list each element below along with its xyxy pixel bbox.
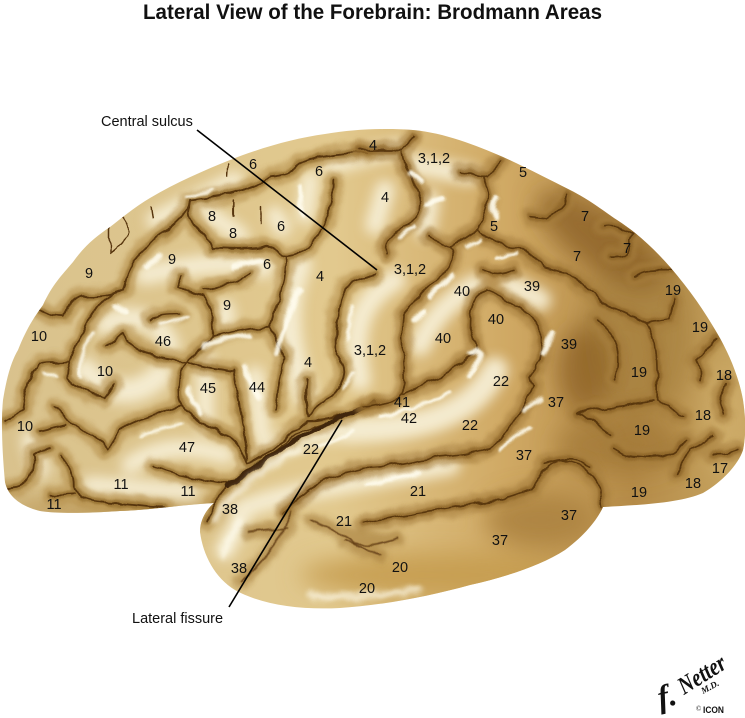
Brodmann area numbers: 22	[303, 442, 319, 458]
Brodmann area numbers: 19	[634, 423, 650, 439]
Brodmann area numbers: 5	[490, 219, 498, 235]
Brodmann area numbers: 37	[561, 508, 577, 524]
central sulcus label: Central sulcus	[101, 114, 193, 130]
Brodmann area numbers: 9	[85, 266, 93, 282]
Brodmann area numbers: 19	[631, 365, 647, 381]
Brodmann area numbers: 9	[168, 252, 176, 268]
Brodmann area numbers: 11	[113, 477, 129, 493]
Brodmann area numbers: 18	[685, 476, 701, 492]
Brodmann area numbers: 4	[369, 138, 377, 154]
signature: F. Netter M.D. and ICON mark: ©	[696, 705, 702, 713]
Brodmann area numbers: 19	[665, 283, 681, 299]
Brodmann area numbers: 19	[692, 320, 708, 336]
Brodmann area numbers: 45	[200, 381, 216, 397]
Brodmann area numbers: 47	[179, 440, 195, 456]
Brodmann area numbers: 6	[249, 157, 257, 173]
Brodmann area numbers: 21	[336, 514, 352, 530]
Brodmann area numbers: 10	[31, 329, 47, 345]
signature: F. Netter M.D. and ICON mark	[654, 650, 731, 715]
Brodmann area numbers: 37	[492, 533, 508, 549]
Brodmann area numbers: 8	[229, 226, 237, 242]
Brodmann area numbers: 4	[381, 190, 389, 206]
Brodmann area numbers: 39	[561, 337, 577, 353]
Brodmann area numbers: 37	[516, 448, 532, 464]
temporal pole sulci	[215, 450, 420, 597]
Brodmann area numbers: 19	[631, 485, 647, 501]
signature: F. Netter M.D. and ICON mark: f.	[654, 676, 680, 715]
Brodmann area numbers: 20	[359, 581, 375, 597]
Brodmann area numbers: 18	[716, 368, 732, 384]
Brodmann area numbers: 40	[488, 312, 504, 328]
Brodmann area numbers: 7	[573, 249, 581, 265]
Brodmann area numbers: 22	[493, 374, 509, 390]
Brodmann area numbers: 46	[155, 334, 171, 350]
brain illustration	[0, 120, 745, 620]
Brodmann area numbers: 38	[231, 561, 247, 577]
Brodmann area numbers: 6	[263, 257, 271, 273]
signature: F. Netter M.D. and ICON mark: M.D.	[698, 678, 721, 696]
lateral fissure label: Lateral fissure	[132, 611, 223, 627]
Brodmann area numbers: 22	[462, 418, 478, 434]
Brodmann area numbers: 10	[97, 364, 113, 380]
Brodmann area numbers: 11	[180, 484, 196, 500]
Brodmann area numbers: 10	[17, 419, 33, 435]
central sulcus leader line	[197, 130, 377, 270]
pale gyrus crowns	[30, 148, 540, 550]
Brodmann area numbers: 39	[524, 279, 540, 295]
title: Lateral View of the Forebrain: Brodmann Areas	[143, 1, 602, 24]
signature: F. Netter M.D. and ICON mark: ICON	[703, 705, 724, 715]
lateral fissure leader line	[229, 420, 342, 607]
Brodmann area numbers: 6	[277, 219, 285, 235]
Brodmann area numbers: 3,1,2	[354, 343, 386, 359]
Brodmann area numbers: 4	[304, 355, 312, 371]
Brodmann area numbers: 44	[249, 380, 265, 396]
Brodmann area numbers: 7	[623, 241, 631, 257]
sulci: parietal, temporal and occipital half	[283, 137, 738, 523]
Brodmann area numbers: 6	[315, 164, 323, 180]
Brodmann area numbers: 20	[392, 560, 408, 576]
Brodmann area numbers: 5	[519, 165, 527, 181]
Brodmann area numbers: 42	[401, 411, 417, 427]
Brodmann area numbers: 9	[223, 298, 231, 314]
signature: F. Netter M.D. and ICON mark: Netter	[672, 650, 731, 701]
Brodmann area numbers: 8	[208, 209, 216, 225]
Brodmann area numbers: 17	[712, 461, 728, 477]
Brodmann area numbers	[17, 138, 732, 597]
Brodmann area numbers: 21	[410, 484, 426, 500]
Brodmann area numbers: 3,1,2	[418, 151, 450, 167]
Brodmann area numbers: 38	[222, 502, 238, 518]
Brodmann area numbers: 4	[316, 269, 324, 285]
sulci: frontal half	[5, 137, 738, 597]
Brodmann area numbers: 3,1,2	[394, 262, 426, 278]
Brodmann area numbers: 7	[581, 209, 589, 225]
Brodmann area numbers: 40	[454, 284, 470, 300]
Brodmann area numbers: 11	[46, 497, 62, 513]
Brodmann area numbers: 40	[435, 331, 451, 347]
Brodmann area numbers: 18	[695, 408, 711, 424]
Brodmann area numbers: 37	[548, 395, 564, 411]
Brodmann area numbers: 41	[394, 395, 410, 411]
